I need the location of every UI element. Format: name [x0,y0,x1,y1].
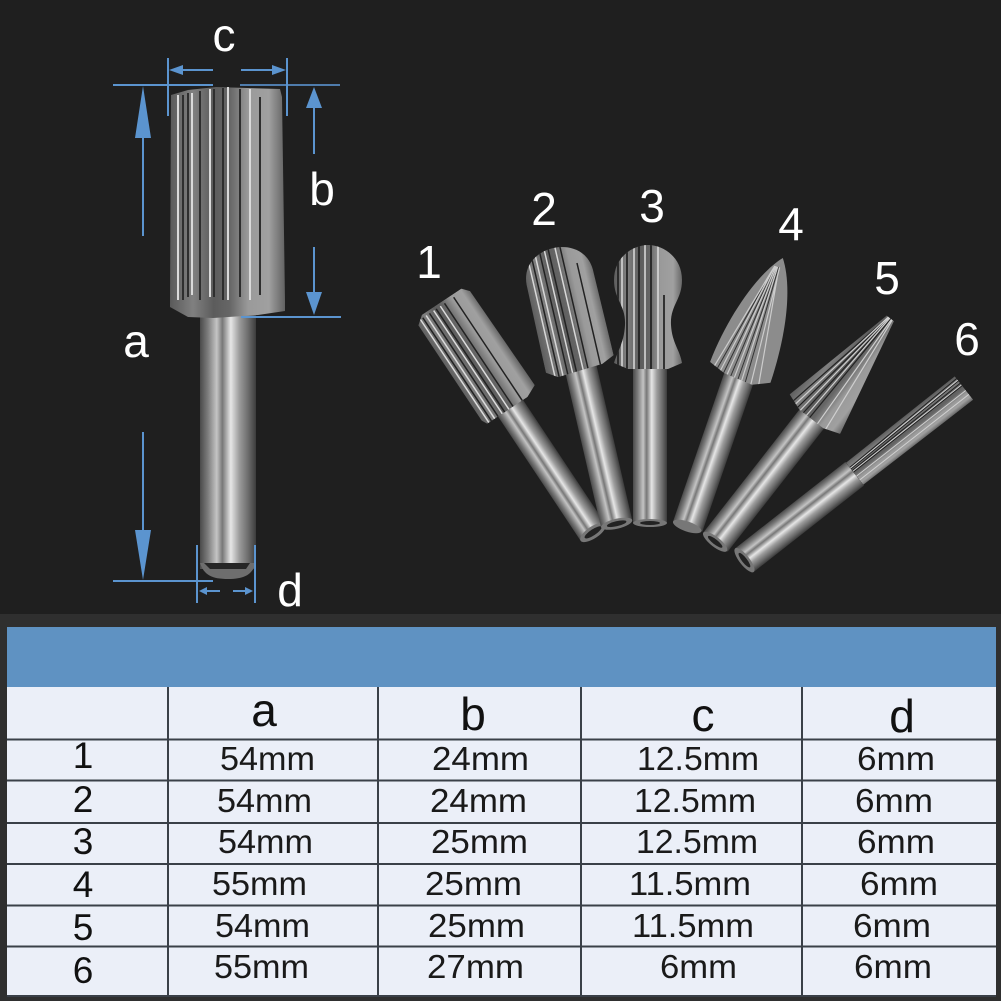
label c: c [212,9,236,61]
column a values: 54mm [217,782,312,819]
column headers [251,684,915,742]
column c values [629,740,759,985]
row numbers: 3 [73,821,93,862]
column d values: 6mm [855,782,933,819]
row numbers: 6 [73,950,93,991]
column headers: a [251,684,277,736]
column d values: 6mm [857,740,935,777]
bit 5 [703,316,894,552]
column d values [853,740,938,985]
number 3: 3 [639,180,665,232]
number 1: 1 [416,236,442,288]
column headers: d [889,690,915,742]
column a values: 54mm [218,823,313,860]
column b values: 25mm [425,865,522,902]
column a values: 55mm [214,948,309,985]
column c values: 12.5mm [636,823,758,860]
number 2: 2 [531,183,557,235]
column a values: 54mm [215,907,310,944]
column c values: 11.5mm [629,865,751,902]
column headers: b [460,688,486,740]
column b values [425,740,529,985]
dimension a [113,84,340,582]
bit 1 [418,288,604,542]
number 6: 6 [954,313,980,365]
column b values: 24mm [430,782,527,819]
bit 3 [613,245,683,527]
size table [7,627,996,996]
number 4: 4 [778,198,804,250]
row numbers: 1 [73,735,93,776]
column c values: 12.5mm [634,782,756,819]
dimension b [241,87,341,318]
column headers: c [692,689,714,741]
column a values: 55mm [212,865,307,902]
row numbers: 2 [73,779,93,820]
blue header band [7,627,996,687]
bit 2 [526,247,632,530]
dimension d [196,545,256,603]
label b: b [309,163,335,215]
bit 4 [673,258,788,534]
column d values: 6mm [853,907,931,944]
column d values: 6mm [860,865,938,902]
row numbers: 5 [73,907,93,948]
column c values: 6mm [660,948,737,985]
large bit photo [170,87,285,579]
dimension diagram: large bit [113,9,341,616]
column b values: 25mm [431,823,528,860]
column b values: 27mm [427,948,524,985]
row numbers: 4 [73,864,93,905]
column c values: 11.5mm [632,907,754,944]
label d: d [277,564,303,616]
column a values [212,740,315,985]
column b values: 25mm [428,907,525,944]
bit 6 [731,376,973,575]
column b values: 24mm [432,740,529,777]
column a values: 54mm [220,740,315,777]
column d values: 6mm [854,948,932,985]
row numbers [73,735,93,991]
dimension c [167,58,288,116]
table body [7,687,996,996]
column c values: 12.5mm [637,740,759,777]
column d values: 6mm [857,823,935,860]
label a: a [123,315,149,367]
lower strip behind table [0,614,1001,1001]
number 5: 5 [874,252,900,304]
